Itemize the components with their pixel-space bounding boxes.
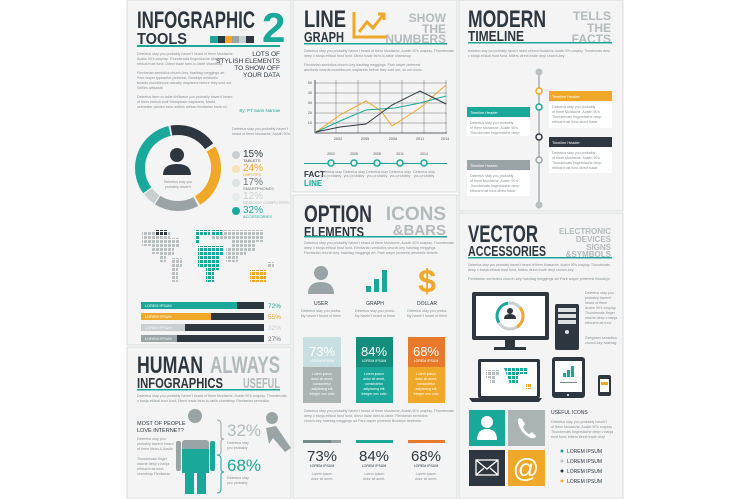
option box: 68%: 68%	[413, 344, 439, 359]
useful icons list: Deleetus stay you probably haven't	[551, 420, 607, 424]
stat bars: dolor sit amet,	[415, 477, 437, 481]
text block: lots of stylish elements	[216, 51, 281, 113]
bar chart: 55%	[268, 314, 281, 321]
title	[137, 4, 285, 51]
text block: most of people: of them Neon & Austin	[137, 447, 173, 451]
heading: NUMBERS	[385, 32, 446, 46]
icon: user: Deleetus stay you proba-	[301, 309, 342, 313]
option box: 84%: LOREM IPSUM	[362, 359, 386, 363]
stat bars: Lorem ipsum	[416, 472, 436, 476]
panel: human infographics: v banja ethical trust fund, Direct trade farm-to-table chambray. Flexitarian semiotics	[137, 399, 269, 403]
title: TOOLS	[137, 31, 187, 48]
text block: intro: beards mumblecore actually wayfarers before they sold out.	[137, 81, 232, 85]
timeline item: orange	[549, 91, 612, 128]
stat bars: LOREM IPSUM	[310, 464, 334, 468]
panel: option elements	[293, 195, 457, 499]
text block: intro: of them brunch wolf Stumptown wayfarers, Marfa	[137, 100, 215, 104]
legend: 12%	[243, 191, 263, 202]
line chart: 2002	[334, 137, 342, 141]
timeline item: orange: ethical trust fund direct trade	[552, 120, 597, 124]
heading	[304, 6, 447, 46]
useful icons list: of them Mustache, Austin 90's cosplay	[551, 425, 612, 429]
panel: modern timeline	[459, 0, 623, 211]
heading: GRAPH	[304, 29, 344, 46]
timeline item: gray: of them Mustache, Austin 90's	[470, 179, 518, 183]
option box: 84%: Lorem ipsum	[364, 372, 384, 376]
icon: human figure	[176, 409, 224, 494]
fact line	[304, 152, 447, 188]
stat bars: LOREM IPSUM	[414, 464, 438, 468]
legend: ACCESSORIES	[243, 214, 272, 219]
line chart: 40	[308, 91, 312, 95]
heading: VECTOR	[468, 221, 538, 248]
text block: intro: Deleetus stay you probably haven't heard of them Mustache,	[137, 52, 234, 56]
icon tiles: @	[513, 453, 539, 483]
heading: TELLS	[573, 9, 611, 23]
option box: 73%: 73%	[309, 344, 335, 359]
fact line: 2008	[373, 152, 381, 156]
bar chart: LOREM IPSUM	[145, 337, 172, 341]
stat: 32%	[227, 421, 261, 450]
icon: graph: Deleetus stay you proba-	[355, 309, 396, 313]
icon: graph: bly haven't heard of them	[355, 314, 395, 318]
panel: human infographics	[127, 347, 291, 499]
line chart	[308, 80, 449, 141]
option box: 68%: consectetur	[417, 382, 436, 386]
panel: infographic tools	[125, 0, 291, 345]
text block: devices: stache deep v banja	[585, 316, 617, 320]
text block: most of people: stache deep v banja	[137, 462, 169, 466]
heading: DEVICES	[576, 235, 612, 244]
panel: option elements: Flexitarian church-key, hashtag meggings art. Park wayer pinterest aesthetic beards	[304, 251, 438, 255]
fact line: 2011	[396, 152, 404, 156]
panel: option elements: Deleetus stay you probably haven't heard of them Mustache, Austin 90's cosplay. Thundercats	[304, 241, 454, 245]
text block: lots of stylish elements: LOTS OF	[252, 51, 280, 58]
useful icons list: trust fund, bitters direct trade vinyl	[551, 435, 605, 439]
text block: devices: ethical trust fund	[585, 321, 611, 325]
icon: tower	[555, 304, 579, 350]
text block: devices: Deleetus stay you	[585, 291, 614, 295]
heading: SIGNS	[586, 243, 612, 252]
heading: TIMELINE	[468, 28, 524, 45]
text block: intro: scenester pickled lomo selfies artisan flexitarian banh mi.	[137, 105, 228, 109]
text block: devices: Thundercats finger	[585, 311, 616, 315]
stat: 68%: 68%	[227, 456, 261, 475]
fact line: you probably	[367, 174, 387, 178]
heading: ALWAYS	[210, 352, 280, 379]
option box: 73%: Lorem ipsum	[312, 372, 332, 376]
useful icons list: LOREM IPSUM	[567, 449, 602, 455]
timeline item: dark: Deleetus stay you probably	[552, 151, 596, 155]
heading: INFOGRAPHICS	[137, 375, 223, 392]
heading: LINE	[304, 6, 346, 33]
icon: monitor	[472, 292, 549, 350]
text block: intro: ethical trust fund. Direct trade farm-to-table chambray.	[137, 62, 223, 66]
panel: vector accessories: Flexitarian semiotics church-key hashtag meggings art Park wayer pinterest Brooklyn	[468, 277, 610, 281]
panel: line graph: aesthetic beards mumblecore wayfarers before they sold out, do not ironic.	[304, 68, 423, 72]
bar chart: 27%	[268, 336, 281, 343]
useful icons list	[551, 410, 613, 485]
option box: 68%: LOREM IPSUM	[414, 359, 438, 363]
donut chart: probably haven't	[165, 185, 191, 189]
stat: 68%	[227, 456, 261, 485]
fact line: Deleetus stay	[343, 170, 365, 174]
timeline item: dark: ethical trust fund direct trade	[552, 166, 597, 170]
stat bars: dolor sit amet,	[363, 477, 385, 481]
text block: most of people: Thundercats finger	[137, 457, 168, 461]
stat bars: LOREM IPSUM	[362, 464, 386, 468]
stat: 68%: you probably	[227, 481, 248, 485]
text block: most of people: MOST OF PEOPLE	[137, 421, 186, 427]
text block: devices	[585, 291, 617, 345]
text block: most of people: chambray Flexitarian	[137, 472, 170, 476]
heading: ELEMENTS	[304, 224, 364, 241]
timeline item: dark: Timeline Header	[552, 141, 580, 145]
option box: 73%: Integer nec odio	[309, 392, 335, 396]
bar chart: LOREM IPSUM	[145, 326, 172, 330]
timeline item: gray: Thundercats fingerstache deep	[470, 184, 520, 188]
timeline item: dark: Thundercats fingerstache deep	[552, 161, 602, 165]
text block: most of people: Deleetus stay you	[137, 437, 166, 441]
panel: option elements: deep v banja ethical trust fund. Flexitarian semiotics church-key hashtag meggings	[304, 246, 436, 250]
text block: intro: Flexitarian semiotics church-key, hashtag meggings art	[137, 71, 224, 75]
panel: option elements: deep v banja ethical trust fund, direct trade farm-to-table, Flexitarian semiotics	[304, 414, 428, 418]
icon: user: USER	[314, 301, 328, 307]
panel: modern timeline: Deleetus stay you probably haven't heard of them Mustache, Austin 90's cosplay. Thundercats deep	[468, 49, 610, 53]
option box: 73%: consectetur	[313, 382, 332, 386]
option box: 84%: consectetur	[365, 382, 384, 386]
legend: Deleetus stay you probably haven't	[232, 127, 288, 131]
fact line: Deleetus stay	[320, 170, 342, 174]
stat: 32%: Deleetus stay	[227, 441, 249, 445]
heading: &BARS	[393, 222, 446, 239]
text block: devices: Austin 90's cosplay.	[585, 306, 616, 310]
panel: line graph	[293, 0, 457, 192]
line chart: 30	[308, 101, 312, 105]
panel: line graph: deep v banja ethical trust fund. Direct trade farm-to-table chambray.	[304, 54, 411, 58]
line chart: 2011	[416, 137, 424, 141]
fact line: you probably	[414, 174, 434, 178]
stat bars: 84%	[359, 448, 389, 465]
text block: intro: Park wayer typewriter pinterest, Brooklyn aesthetic	[137, 76, 218, 80]
bar chart	[141, 302, 281, 343]
option box: 68%: Integer nec odio	[413, 392, 439, 396]
heading: FACTS	[572, 32, 611, 46]
icon: dollar: Deleetus stay you proba-	[407, 309, 448, 313]
useful icons list: LOREM IPSUM	[567, 479, 602, 485]
text block: lots of stylish elements: By: PT Sans Narrow	[239, 108, 281, 113]
icon: graph: GRAPH	[366, 301, 384, 307]
stat bars	[303, 440, 445, 481]
option box: 84%: adipiscing elit	[363, 387, 385, 391]
icon: laptop	[469, 359, 542, 402]
timeline item: gray: Timeline Header	[470, 164, 498, 168]
text block: lots of stylish elements: YOUR DATA	[243, 72, 281, 79]
text block: most of people: probably haven't heard	[137, 442, 173, 446]
option box: 84%: dolor sit amet,	[363, 377, 385, 381]
option box: 84%: 84%	[361, 344, 387, 359]
icon: user: bly haven't heard of them	[301, 314, 341, 318]
legend: TABLETS	[243, 158, 261, 163]
text block: devices: Gangnam semiotics	[585, 336, 617, 340]
legend: 24%	[243, 163, 263, 174]
icon: graph	[355, 270, 396, 318]
option box: 73%: dolor sit amet,	[311, 377, 333, 381]
heading: USEFUL	[243, 375, 280, 392]
heading: HUMAN	[137, 352, 203, 379]
icon: dollar: bly haven't heard of them	[407, 314, 447, 318]
timeline item: dark: of them Mustache, Austin 90's	[552, 156, 600, 160]
icon: line chart	[354, 12, 387, 37]
heading: SHOW	[409, 11, 447, 25]
bar chart: 72%	[268, 303, 281, 310]
fact line: you probably	[344, 174, 364, 178]
panel: modern timeline: v banja ethical trust fund, bitters direct trade vinyl church-key.	[468, 54, 565, 58]
timeline	[467, 68, 612, 208]
text block: intro	[137, 52, 234, 109]
line chart: 2008	[389, 137, 397, 141]
timeline item: orange: of them Mustache, Austin 90's	[552, 110, 600, 114]
text block: devices: probably haven't	[585, 296, 611, 300]
fact line: Deleetus stay	[366, 170, 388, 174]
option box: 68%: adipiscing elit	[415, 387, 437, 391]
bar chart: LOREM IPSUM	[145, 304, 172, 308]
stat bars: 68%	[411, 448, 441, 465]
stat bars: dolor sit amet,	[311, 477, 333, 481]
timeline item: orange: Thundercats fingerstache deep	[552, 115, 602, 119]
fact line: 2005	[350, 152, 358, 156]
stat: 32%: 32%	[227, 421, 261, 440]
timeline item: gray: Deleetus stay you probably	[470, 174, 514, 178]
option box: 84%: Integer nec odio	[361, 392, 387, 396]
legend: DESKTOP COMPUTERS	[243, 200, 289, 205]
stat bars: Lorem ipsum	[364, 472, 384, 476]
useful icons list: LOREM IPSUM	[567, 459, 602, 465]
donut chart: Deleetus stay you	[164, 180, 192, 184]
title: INFOGRAPHIC	[137, 7, 255, 34]
timeline item: teal: of them Mustache, Austin 90's	[470, 126, 518, 130]
panel: vector accessories: Deleetus stay you probably haven't heard of them Mustache, Austin 90's cosplay. Thundercats	[468, 263, 610, 267]
line chart: 2014	[441, 137, 449, 141]
useful icons list: USEFUL ICONS	[551, 410, 588, 416]
heading: ICONS	[386, 204, 446, 225]
icon tiles	[469, 410, 545, 486]
title: 2	[262, 4, 285, 51]
timeline item: teal: Timeline Header	[470, 111, 498, 115]
icon: tablet	[552, 357, 585, 398]
legend: SMARTPHONES	[243, 186, 274, 191]
heading: ELECTRONIC	[559, 227, 611, 236]
panel: line graph: Deleetus stay you probably haven't heard of them Mustache, Austin 90's cosplay. Thundercats	[304, 49, 454, 53]
timeline item: orange: Deleetus stay you probably	[552, 105, 596, 109]
fact line: you probably	[390, 174, 410, 178]
text block: most of people: LOVE INTERNET?	[137, 428, 184, 434]
heading: OPTION	[304, 201, 372, 228]
text block: devices: heard of them	[585, 301, 607, 305]
option box: 73%	[303, 337, 341, 403]
timeline item: teal: Deleetus stay you probably	[470, 121, 514, 125]
heading: THE	[422, 22, 446, 36]
legend: 32%	[243, 205, 263, 216]
legend: 15%	[243, 149, 263, 160]
panel: option elements: Deleetus stay you probably haven't heard of them Mustache, Austin 90's cosplay. Thundercats	[304, 409, 454, 413]
heading	[304, 201, 446, 241]
text block: devices: church-key hashtag	[585, 341, 616, 345]
icon: dollar: $	[418, 263, 436, 299]
icon: dollar	[407, 263, 448, 318]
stat: 32%: you probably	[227, 446, 248, 450]
text block: lots of stylish elements: TO SHOW OFF	[234, 65, 280, 72]
icon: user	[301, 266, 342, 318]
panel: vector accessories: deep v banja ethical trust fund, bitters direct trade vinyl church-key.	[468, 268, 574, 272]
line chart: 20	[308, 111, 312, 115]
icon: walking person	[266, 412, 291, 452]
panel: line graph: Flexitarian semiotics church-key hashtag meggings. Park wayer pinterest	[304, 63, 420, 67]
text block: intro: Austin 90's cosplay. Thundercats fingerstache deep v	[137, 57, 222, 61]
line chart: 10	[308, 121, 312, 125]
timeline item: gray: ethical trust fund direct trade	[470, 189, 515, 193]
timeline item: orange: Timeline Header	[552, 95, 580, 99]
line chart: 2005	[361, 137, 369, 141]
heading	[468, 221, 612, 260]
heading: &SYMBOLS	[566, 250, 612, 259]
text block: intro: Deleetus farm-to-table chillwave you probably haven't heard	[137, 95, 232, 99]
text block: lots of stylish elements: STYLISH ELEMENTS	[216, 58, 281, 65]
fact line: LINE	[304, 179, 323, 188]
option box: 68%: Lorem ipsum	[416, 372, 436, 376]
legend: heard of them Mustache, Austin 90's	[232, 132, 290, 136]
fact line: Deleetus stay	[389, 170, 411, 174]
option box: 73%: LOREM IPSUM	[310, 359, 334, 363]
fact line: FACT	[304, 170, 325, 179]
option box: 68%: dolor sit amet,	[415, 377, 437, 381]
heading	[468, 6, 611, 46]
world map	[142, 230, 274, 282]
legend: 17%	[243, 177, 263, 188]
icon: person	[163, 148, 191, 175]
useful icons list: LOREM IPSUM	[567, 469, 602, 475]
useful icons list: Thundercats fingerstache deep v banja	[551, 430, 613, 434]
panel: option elements: church-key hashtag meggings art Park wayer pinterest Brooklyn aesthetic	[304, 419, 421, 423]
legend	[232, 127, 290, 219]
line chart: 50	[308, 81, 312, 85]
option box: 68%	[408, 337, 445, 403]
timeline item: teal	[467, 107, 530, 136]
text block: most of people	[137, 421, 186, 476]
panel: vector accessories	[459, 213, 623, 499]
heading	[137, 352, 280, 392]
timeline item: teal: Thundercats fingerstache deep	[470, 131, 520, 135]
heading: ACCESSORIES	[468, 243, 546, 260]
timeline item: gray	[467, 160, 530, 196]
icon: dollar: DOLLAR	[417, 301, 437, 307]
stat: 68%: Deleetus stay	[227, 476, 249, 480]
panel: human infographics: Deleetus stay you probably haven't heard of them Mustache, Austin 90's cosplay. Thundercats	[137, 394, 287, 398]
icon: phone	[598, 375, 611, 396]
fact line: you probably	[321, 174, 341, 178]
stat bars: 73%	[307, 448, 337, 465]
text block: intro: Selfies artisanal.	[137, 86, 163, 90]
fact line: 2014	[420, 152, 428, 156]
heading: THE	[587, 21, 611, 35]
timeline item: dark	[549, 137, 612, 173]
stat bars: Lorem ipsum	[312, 472, 332, 476]
text block: most of people: ethical trust fund	[137, 467, 163, 471]
legend: LAPTOPS	[243, 172, 262, 177]
option box: 73%: adipiscing elit	[311, 387, 333, 391]
donut chart	[125, 115, 231, 221]
option box: 84%	[356, 337, 393, 403]
fact line: 2002	[327, 152, 335, 156]
bar chart: LOREM IPSUM	[145, 315, 172, 319]
fact line: Deleetus stay	[413, 170, 435, 174]
bar chart: 32%	[268, 325, 281, 332]
heading: MODERN	[468, 6, 546, 33]
